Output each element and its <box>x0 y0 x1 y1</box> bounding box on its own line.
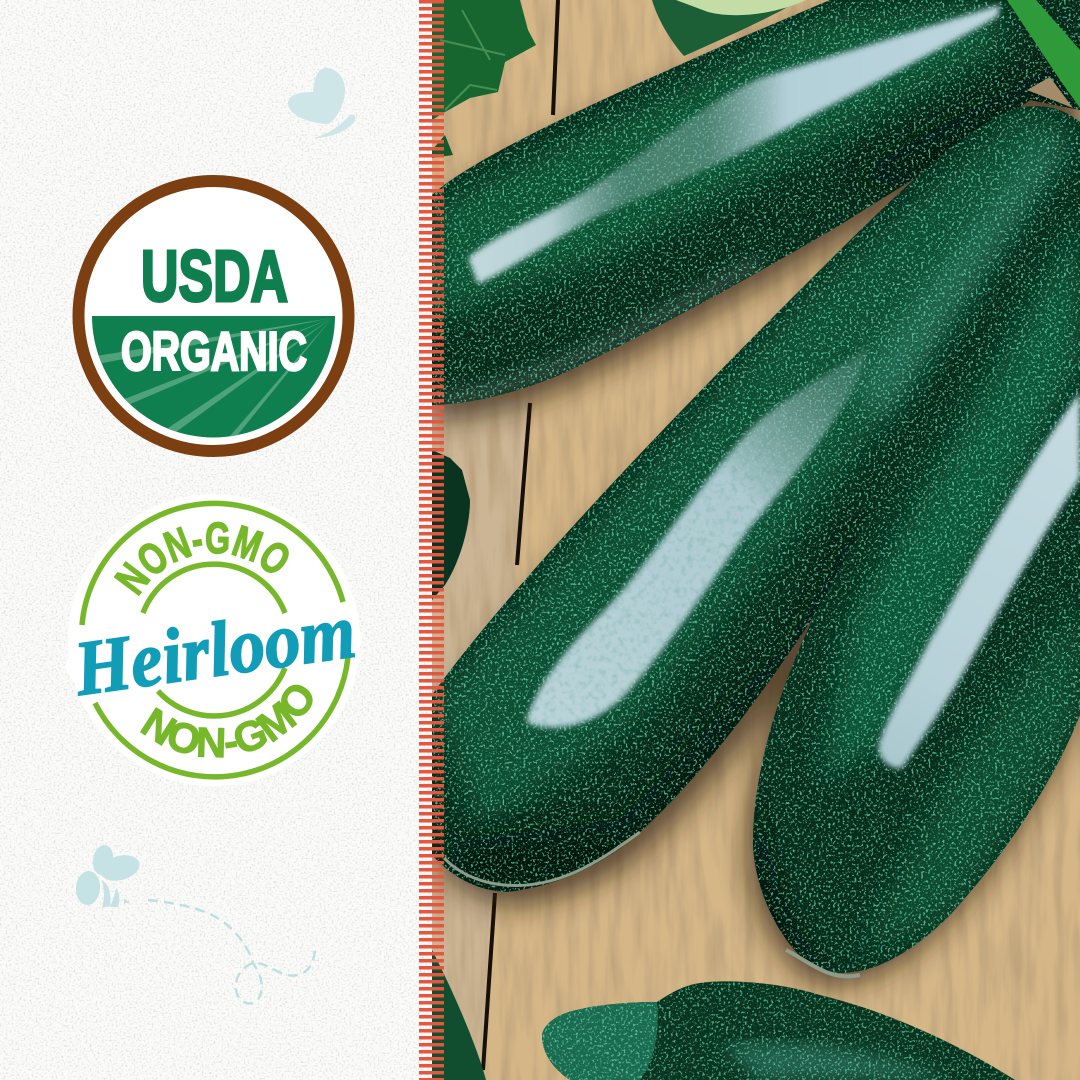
fabric background panel <box>0 0 432 1080</box>
badge rings <box>82 503 348 777</box>
badge: USDA Organic seal <box>78 181 348 451</box>
small zucchini at left edge <box>432 450 486 1080</box>
seal lower green field with sun rays <box>88 316 338 441</box>
shadows under zucchini <box>432 16 1080 985</box>
wooden planks <box>432 0 1080 1080</box>
green stem at top right <box>1007 0 1080 108</box>
Heirloom script: Heirloom <box>68 587 361 712</box>
zucchini: bottom <box>542 981 1015 1080</box>
lower NON-GMO curved text: NON-GMO <box>140 684 313 758</box>
icon: bee with dashed flight path <box>75 843 315 1004</box>
badge: Non-GMO Heirloom <box>66 494 362 786</box>
upper NON-GMO curved text: NON-GMO <box>114 522 289 596</box>
ORGANIC wordmark: ORGANIC <box>121 320 307 382</box>
leaf: top centre <box>652 0 806 56</box>
zucchini: right <box>745 175 1080 976</box>
icon: butterfly <box>288 68 355 138</box>
zucchini: top <box>432 0 1080 405</box>
wood gap between top and middle zucchini <box>1027 77 1073 108</box>
zucchini: middle <box>432 106 1080 900</box>
USDA wordmark: USDA <box>141 237 288 317</box>
red stitched edge <box>419 0 444 1080</box>
leaf: top left <box>432 0 536 158</box>
photo: zucchini on wooden table <box>432 0 1080 1080</box>
